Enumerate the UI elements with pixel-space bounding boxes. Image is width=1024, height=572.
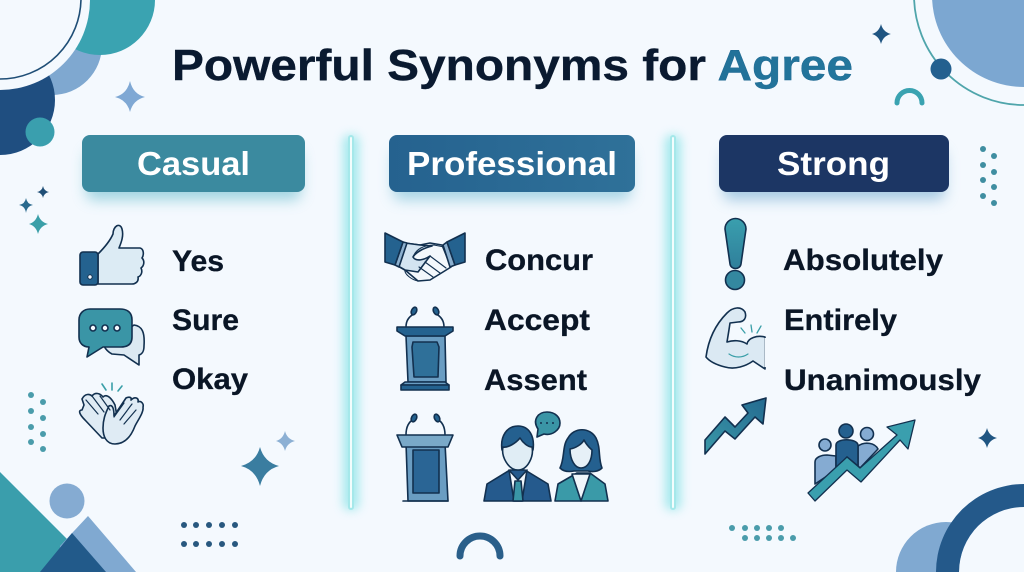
word: assent: Assent: [484, 364, 587, 397]
icon: rising arrow: [705, 398, 766, 454]
icon: team with rising arrow: [808, 420, 915, 501]
word: concur: Concur: [485, 244, 593, 277]
decoration: bottom dots: [181, 522, 238, 547]
icon: exclamation mark: [725, 218, 746, 290]
icon: speech bubbles: [79, 309, 144, 365]
panel: professional: [385, 135, 635, 501]
title: Powerful Synonyms for Agree: [172, 41, 853, 90]
header: strong: Strong: [777, 145, 890, 182]
word: yes: Yes: [172, 245, 224, 278]
divider: right: [665, 135, 681, 510]
icon: flexed arm: [706, 308, 768, 369]
header: professional: Professional: [407, 145, 617, 182]
divider: left: [343, 135, 359, 510]
icon: thumbs up: [80, 225, 144, 285]
word: unanimously: Unanimously: [784, 364, 981, 397]
header: strong: [719, 135, 949, 200]
decoration: right dots: [980, 146, 997, 206]
panel: casual: [79, 135, 305, 444]
icon: handshake: [385, 233, 465, 281]
decoration: teal arc: [897, 90, 922, 103]
icon: clapping hands: [80, 383, 143, 444]
word: sure: Sure: [172, 304, 239, 337]
decoration: left dots: [28, 392, 46, 452]
decoration: bottom-left shapes: [0, 472, 136, 572]
header: casual: Casual: [137, 145, 250, 182]
arc: bottom center: [460, 536, 500, 556]
word: absolutely: Absolutely: [783, 244, 943, 277]
header: professional: [389, 135, 635, 200]
word: okay: Okay: [172, 363, 248, 396]
decoration: top-left sparkles: [19, 81, 145, 234]
panel: strong: [705, 135, 981, 501]
word: accept: Accept: [484, 304, 590, 337]
decoration: top-left circles: [0, 0, 155, 155]
decoration: top-right sparkle: [872, 24, 891, 44]
icon: business people: [484, 412, 608, 501]
decoration: bottom-right ring: [896, 484, 1024, 572]
icon: podium with microphones: [397, 306, 453, 390]
icon: second podium: [397, 413, 453, 501]
decoration: right sparkle: [978, 428, 997, 448]
word: entirely: Entirely: [784, 304, 897, 337]
header: casual: [82, 135, 305, 200]
decoration: lower-right dots: [729, 525, 796, 541]
decoration: bottom sparkles: [241, 431, 295, 486]
decoration: top-right circles: [914, 0, 1024, 105]
